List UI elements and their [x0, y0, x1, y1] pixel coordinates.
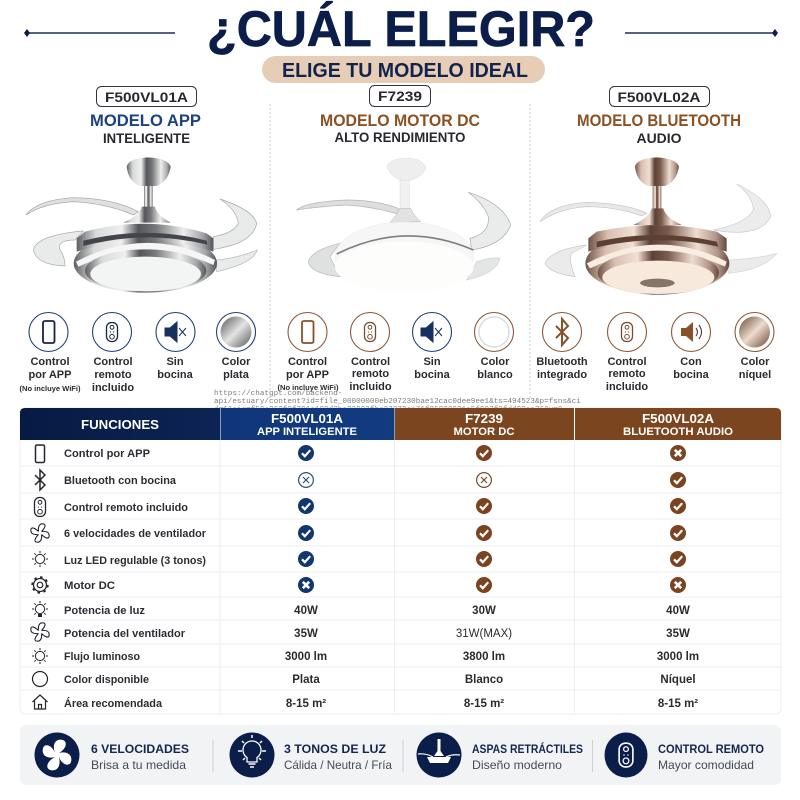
row icons: [31, 445, 49, 709]
row labels: 6 velocidades de ventilador: [64, 528, 207, 540]
icon: phone: [302, 321, 314, 343]
row labels: Bluetooth con bocina: [64, 475, 177, 487]
values: F7239: Blanco: [465, 674, 503, 686]
icon: muted speaker: [421, 322, 442, 342]
icon: fan: [31, 623, 49, 641]
label: con bocina: Con: [680, 356, 702, 368]
benefit: 6 velocidades: 6 VELOCIDADES: [91, 742, 189, 756]
icon: gear: [32, 577, 48, 593]
row labels: Control por APP: [64, 448, 150, 460]
values: F500VL02A: [657, 605, 699, 710]
label: control remoto: incluido: [92, 382, 134, 394]
icon: bulb: [32, 601, 48, 617]
model header: F7239: ALTO RENDIMIENTO: [334, 130, 466, 145]
table body: [20, 408, 781, 714]
row labels: Motor DC: [64, 580, 115, 592]
source url text: d=1&sig=f59c263f0f791a100d3bc23093fbc27372ea71f05828031a5f907f2fdd22ea76&v=0: [214, 406, 563, 414]
feature icons: F500VL02A: [536, 312, 774, 393]
values: F7239: 3800 lm: [463, 651, 505, 663]
label: control remoto: incluido: [349, 381, 392, 393]
fan photo: nickel: [540, 157, 777, 295]
label: control por app: Control: [30, 356, 70, 368]
model header: F7239: [320, 86, 480, 145]
benefit: 6 velocidades: [34, 732, 189, 778]
values: F500VL02A: 35W: [666, 628, 690, 640]
benefit: 3 tonos de luz: [230, 732, 392, 778]
icon: remote: [106, 322, 118, 342]
values: F500VL02A: 8-15 m²: [658, 698, 698, 710]
row labels: Potencia de luz: [64, 605, 145, 617]
icon: nickel swatch: [739, 316, 770, 348]
label: sin bocina: bocina: [414, 369, 451, 381]
values: F500VL01A: 3000 lm: [285, 651, 327, 663]
icon: bluetooth: [35, 470, 45, 490]
icon: phone: [43, 321, 54, 343]
table header: FUNCIONES: [81, 417, 159, 432]
values: F500VL02A: 3000 lm: [657, 651, 699, 663]
feature icons: F7239: [278, 312, 514, 393]
row labels: Área recomendada: [64, 697, 163, 710]
values: F500VL02A: Níquel: [660, 674, 696, 686]
values: F500VL01A: 8-15 m²: [286, 698, 326, 710]
icon: speaker: [681, 322, 693, 342]
benefit: control remoto: [604, 732, 764, 778]
model header: F500VL02A: [577, 86, 741, 146]
label: no incluye wifi: (No incluye WiFi): [20, 384, 81, 393]
table header: [20, 408, 781, 440]
benefit: aspas retractiles: Diseño moderno: [472, 758, 562, 772]
model header: F500VL01A: MODELO APP: [90, 111, 201, 130]
benefit: 6 velocidades: Brisa a tu medida: [91, 758, 186, 772]
label: control por app: por APP: [28, 369, 72, 381]
model header: F7239: MODELO MOTOR DC: [320, 111, 480, 130]
icon: phone: [36, 445, 44, 462]
row labels: Color disponible: [64, 674, 149, 686]
icon: house: [32, 695, 48, 709]
label: con bocina: bocina: [673, 369, 710, 381]
label: control remoto: Control: [607, 356, 647, 368]
label: control remoto: Control: [93, 356, 133, 368]
comparison table: [20, 408, 781, 714]
benefit: 3 tonos de luz: Cálida / Neutra / Fría: [284, 758, 392, 772]
benefit: control remoto: CONTROL REMOTO: [658, 742, 764, 756]
fan photo: white: [297, 158, 511, 292]
label: control remoto: Control: [351, 356, 390, 368]
label: sin bocina: Sin: [423, 356, 441, 368]
icon: silver swatch: [220, 316, 252, 348]
table header: F500VL02A: [642, 411, 715, 426]
fan photo: silver: [26, 157, 257, 293]
values: F7239: [456, 605, 512, 710]
label: control remoto: remoto: [352, 368, 389, 380]
label: sin bocina: bocina: [157, 369, 194, 381]
values: F7239: 30W: [472, 605, 496, 617]
subtitle pill: ELIGE TU MODELO IDEAL: [282, 60, 528, 82]
title: ¿CUÁL ELEGIR?: [207, 1, 595, 57]
values: F7239: 31W(MAX): [456, 628, 512, 640]
label: control por app: Control: [288, 356, 327, 368]
label: control remoto: remoto: [608, 368, 646, 380]
benefit: aspas retractiles: ASPAS RETRÁCTILES: [472, 741, 583, 756]
label: color plata: Color: [222, 356, 251, 368]
model header: F500VL02A: MODELO BLUETOOTH: [577, 111, 741, 130]
status marks: F500VL02A: [670, 445, 686, 593]
feature icons: F500VL01A: [20, 312, 256, 394]
row labels: Luz LED regulable (3 tonos): [64, 555, 206, 567]
label: bluetooth integrado: Bluetooth: [536, 356, 588, 368]
label: sin bocina: Sin: [166, 356, 184, 368]
row labels: Control remoto incluido: [64, 502, 188, 514]
values: F500VL01A: Plata: [292, 674, 320, 686]
benefit: 3 tonos de luz: 3 TONOS DE LUZ: [284, 742, 386, 756]
label: control remoto: incluido: [606, 381, 648, 393]
label: color niquel: Color: [741, 356, 770, 368]
benefit: aspas retractiles: [416, 732, 583, 778]
label: color plata: plata: [223, 369, 250, 381]
footer benefits panel: [20, 725, 781, 785]
benefit: control remoto: Mayor comodidad: [658, 758, 754, 772]
values: F500VL02A: 40W: [666, 605, 690, 617]
label: control remoto: remoto: [94, 369, 132, 381]
row labels: Potencia del ventilador: [64, 628, 186, 640]
icon: fan: [31, 524, 49, 542]
icon: remote: [364, 322, 376, 342]
icon: remote: [34, 498, 46, 516]
label: no incluye wifi: (No incluye WiFi): [278, 383, 339, 392]
label: color blanco: blanco: [477, 369, 513, 381]
table header: F500VL01A: [271, 411, 344, 426]
model header: F500VL01A: F500VL01A: [105, 89, 188, 105]
status marks: F500VL01A: [298, 445, 314, 593]
table header: APP INTELIGENTE: [257, 426, 357, 438]
icon: remote: [622, 322, 632, 342]
source url text: https://chatgpt.com/backend-: [214, 390, 342, 398]
icon: muted speaker: [165, 322, 186, 342]
table header: F7239: [465, 411, 503, 426]
model header: F500VL02A: F500VL02A: [618, 89, 700, 105]
label: control por app: por APP: [286, 369, 329, 381]
icon: sun: [32, 551, 48, 567]
table header: MOTOR DC: [454, 426, 515, 438]
values: F500VL01A: 40W: [294, 605, 318, 617]
model header: F500VL02A: AUDIO: [636, 131, 682, 146]
label: color niquel: níquel: [739, 369, 771, 381]
icon: bluetooth: [556, 319, 568, 345]
values: F500VL01A: 35W: [294, 628, 318, 640]
values: F500VL01A: [285, 605, 327, 710]
values: F7239: 8-15 m²: [464, 698, 504, 710]
model header: F500VL01A: INTELIGENTE: [103, 131, 190, 146]
icon: white swatch: [479, 317, 509, 347]
row labels: Flujo luminoso: [64, 651, 140, 663]
icon: color circle: [32, 672, 48, 686]
model header: F500VL01A: [90, 86, 201, 146]
label: bluetooth integrado: integrado: [537, 369, 587, 381]
status marks: F7239: [476, 445, 492, 593]
source url text: api/estuary/content?id=file_00000000eb207230bae12cac0dee9ee1&ts=494523&p=fsns&ci: [214, 398, 581, 406]
model header: F7239: F7239: [378, 88, 422, 104]
icon: sun: [32, 648, 48, 664]
label: color blanco: Color: [481, 356, 510, 368]
icon: sound waves: [696, 325, 702, 339]
row labels: [64, 448, 207, 710]
table header: BLUETOOTH AUDIO: [623, 426, 733, 438]
